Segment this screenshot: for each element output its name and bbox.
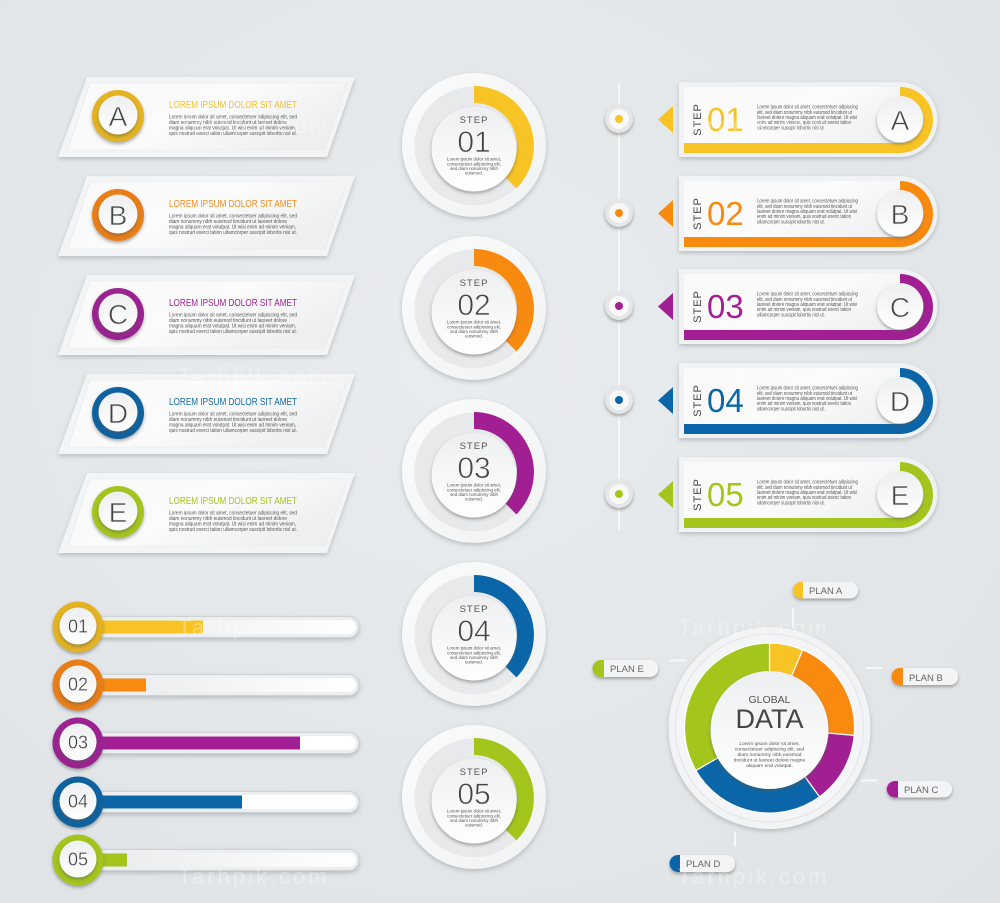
center disc: euismod. — [465, 496, 483, 502]
progress arc — [474, 738, 534, 840]
segment: plan A — [770, 643, 803, 677]
number badge: 05 — [68, 850, 88, 870]
label pill: plan C — [887, 781, 952, 798]
step label: STEP — [692, 197, 704, 230]
number badge — [52, 776, 104, 828]
label pill: plan E — [592, 660, 658, 677]
center disc — [710, 671, 828, 789]
letter badge — [877, 284, 923, 330]
pointer arrow — [658, 293, 673, 320]
step number: 01 — [707, 101, 744, 138]
panel: lettered banner B — [58, 176, 355, 256]
letter badge: C — [890, 292, 910, 323]
letter badge: D — [890, 386, 910, 417]
text block: laoreet dolore magna aliquam erat volutpat. Ut wisi — [757, 302, 857, 308]
center disc: sed diam nonummy nibh — [450, 655, 498, 660]
step number: 03 — [707, 288, 744, 325]
text block: Lorem ipsum dolor sit amet, consectetuer adipiscing elit, sed — [169, 412, 297, 418]
text block: ullamcorper suscipit lobortis nisl ut. — [757, 126, 825, 132]
letter badge: A — [891, 105, 910, 136]
center disc: 02 — [457, 289, 491, 322]
panel: step card 02 — [605, 176, 938, 251]
icon: letter badge C — [92, 288, 144, 340]
progress arc — [474, 249, 534, 351]
progress arc — [474, 86, 534, 188]
label pill: plan A: PLAN A — [809, 586, 843, 597]
timeline node — [605, 105, 633, 133]
segment: plan D — [696, 756, 820, 813]
timeline node — [605, 386, 633, 414]
number badge: 04 — [68, 792, 88, 812]
text block: magna aliquam erat volutpat. Ut wisi enim ad minim veniam, — [169, 224, 296, 230]
center disc — [432, 270, 516, 354]
bar fill — [96, 620, 203, 634]
text block: Lorem ipsum dolor sit amet, consectetuer adipiscing elit, sed — [169, 214, 297, 220]
text block: quis nostrud exerci tation ullamcorper suscipit lobortis nisl ut. — [169, 230, 297, 236]
text block: magna aliquam erat volutpat. Ut wisi enim ad minim veniam, — [169, 522, 296, 528]
center disc: consectetuer adipiscing elit, — [447, 488, 501, 492]
panel: step ring 04 — [402, 562, 546, 706]
timeline node — [605, 292, 633, 320]
watermark: Tarhpik.com — [678, 364, 830, 389]
center disc — [432, 596, 516, 680]
text block: ullamcorper suscipit lobortis nisl ut. — [757, 312, 825, 318]
center disc: aliquam erat volutpat. — [746, 763, 793, 769]
icon: letter badge A — [92, 90, 144, 142]
text block — [169, 510, 297, 533]
center disc: 03 — [457, 452, 491, 485]
panel: progress bar 04 — [52, 776, 359, 828]
text block: enim ad minim veniam, quis nostrud exerci tation — [757, 401, 851, 407]
segment: plan B — [791, 650, 855, 735]
number badge: 03 — [68, 732, 88, 752]
pointer arrow — [658, 481, 673, 508]
center disc: Lorem ipsum dolor sit amet, — [447, 482, 501, 488]
center disc — [432, 432, 516, 518]
step number: 05 — [707, 476, 744, 513]
bar fill — [96, 854, 127, 866]
text block: quis nostrud exerci tation ullamcorper suscipit lobortis nisl ut. — [169, 329, 297, 335]
number badge: 01 — [68, 616, 88, 636]
text block: laoreet dolore magna aliquam erat volutpat. Ut wisi — [757, 115, 857, 121]
center disc: 05 — [457, 778, 491, 811]
text block: enim ad minim veniam, quis nostrud exerci tation — [757, 214, 851, 220]
letter badge — [877, 96, 923, 142]
text block: laoreet dolore magna aliquam erat volutpat. Ut wisi — [757, 396, 857, 402]
letter badge — [877, 472, 923, 518]
text block: diam nonummy nibh euismod tincidunt ut laoreet dolore — [169, 516, 287, 522]
text block — [757, 480, 858, 506]
text block: elit, sed diam nonummy nibh euismod tincidunt ut — [757, 110, 853, 116]
step number: 04 — [707, 382, 744, 419]
timeline line — [618, 84, 620, 530]
center disc: 04 — [457, 615, 491, 648]
center disc: consectetuer adipiscing elit, — [447, 324, 501, 330]
text block: diam nonummy nibh euismod tincidunt ut laoreet dolore — [169, 318, 287, 324]
text block: laoreet dolore magna aliquam erat volutpat. Ut wisi — [757, 209, 857, 215]
center disc: sed diam nonummy nibh — [450, 166, 498, 171]
panel: progress bar 05 — [52, 834, 359, 886]
colored bar and arc — [684, 462, 933, 528]
label pill: plan D — [670, 855, 735, 872]
label pill: plan E: PLAN E — [610, 664, 644, 675]
chart: global data donut — [668, 627, 870, 829]
center disc: DATA — [735, 704, 804, 734]
icon: letter badge A: A — [109, 101, 128, 132]
panel: step ring 02 — [402, 236, 546, 380]
text block: Lorem ipsum dolor sit amet, consectetuer adipiscing elit, sed — [169, 312, 297, 318]
text block: quis nostrud exerci tation ullamcorper suscipit lobortis nisl ut. — [169, 527, 297, 533]
center disc: STEP — [460, 115, 488, 126]
segment: plan C — [802, 733, 854, 797]
number badge: 02 — [68, 674, 88, 694]
watermark: Tarhpik.com — [178, 864, 330, 889]
progress arc — [474, 575, 534, 677]
timeline node — [605, 199, 633, 227]
watermark — [178, 113, 830, 889]
text block: quis nostrud exerci tation ullamcorper suscipit lobortis nisl ut. — [169, 131, 297, 137]
center disc: Lorem ipsum dolor sit amet, — [447, 808, 501, 814]
center disc: tincidunt ut laoreet dolore magna — [734, 758, 805, 764]
panel: lettered banner D — [58, 374, 355, 454]
panel: step ring 05 — [402, 725, 546, 869]
panel: step card 05 — [605, 457, 938, 532]
text block: elit, sed diam nonummy nibh euismod tincidunt ut — [757, 485, 853, 491]
label pill: plan D: PLAN D — [686, 859, 720, 870]
step label: STEP — [692, 290, 704, 323]
center disc: consectetuer adipiscing elit, — [447, 650, 501, 656]
text block — [169, 412, 297, 434]
icon: letter badge E — [92, 486, 144, 538]
text block: diam nonummy nibh euismod tincidunt ut laoreet dolore — [169, 120, 287, 126]
segment: plan E — [685, 643, 770, 770]
center disc: STEP — [460, 441, 488, 452]
panel: step ring 01 — [402, 73, 546, 217]
center disc — [432, 106, 516, 192]
pointer arrow — [658, 106, 673, 133]
text block: quis nostrud exerci tation ullamcorper suscipit lobortis nisl ut. — [169, 428, 297, 434]
center disc — [432, 758, 516, 844]
text block: Lorem ipsum dolor sit amet, consectetuer adipiscing — [757, 198, 858, 204]
center disc: 01 — [457, 126, 491, 159]
text block: ullamcorper suscipit lobortis nisl ut. — [757, 220, 825, 226]
center disc: Lorem ipsum dolor sit amet, — [739, 741, 800, 747]
panel: step card 01 — [605, 82, 938, 157]
center disc: sed diam nonummy nibh — [450, 492, 498, 497]
center disc: euismod. — [465, 334, 483, 338]
number badge — [52, 718, 104, 768]
colored bar and arc — [684, 181, 933, 247]
bar fill — [96, 678, 146, 692]
heading: LOREM IPSUM DOLOR SIT AMET — [169, 397, 297, 408]
text block: ullamcorper suscipit lobortis nisl ut. — [757, 500, 825, 506]
center disc: euismod. — [465, 170, 483, 176]
text block — [169, 312, 297, 335]
watermark: Tarhpik.com — [678, 864, 830, 889]
center disc: consectetuer adipiscing elit, — [447, 814, 501, 818]
watermark: Tarhpik.com — [678, 615, 830, 640]
center disc: STEP — [460, 604, 488, 615]
bar fill — [96, 736, 300, 750]
heading: LOREM IPSUM DOLOR SIT AMET — [169, 100, 297, 111]
label pill: plan B — [892, 668, 958, 685]
watermark: Tarhpik.com — [178, 615, 330, 640]
colored bar and arc — [684, 368, 933, 434]
label pill: plan C: PLAN C — [904, 785, 938, 796]
center disc: euismod. — [465, 660, 483, 664]
icon: letter badge B: B — [109, 200, 127, 231]
panel: progress bar 02 — [52, 660, 359, 710]
icon: letter badge D — [92, 387, 144, 439]
text block: magna aliquam erat volutpat. Ut wisi enim ad minim veniam, — [169, 324, 296, 330]
text block — [169, 214, 297, 236]
letter badge: B — [891, 199, 909, 230]
text block: ullamcorper suscipit lobortis nisl ut. — [757, 406, 825, 412]
number badge — [52, 602, 104, 652]
number badge — [52, 660, 104, 710]
pointer arrow — [658, 387, 673, 414]
text block: Lorem ipsum dolor sit amet, consectetuer adipiscing — [757, 480, 858, 486]
center disc: diam nonummy nibh euismod — [738, 752, 802, 758]
text block: elit, sed diam nonummy nibh euismod tincidunt ut — [757, 391, 853, 397]
heading: LOREM IPSUM DOLOR SIT AMET — [169, 298, 297, 309]
center disc: consectetuer adipiscing elit, — [447, 162, 501, 166]
center disc: Lorem ipsum dolor sit amet, — [447, 156, 501, 162]
text block — [757, 104, 858, 132]
text block: enim ad minim veniam, quis nostrud exerci tation — [757, 307, 851, 313]
letter badge — [877, 378, 923, 424]
label pill: plan B: PLAN B — [909, 673, 943, 684]
icon: letter badge E: E — [109, 497, 127, 528]
pointer arrow — [658, 200, 673, 227]
text block — [757, 198, 858, 226]
text block: Lorem ipsum dolor sit amet, consectetuer adipiscing elit, sed — [169, 114, 297, 120]
text block: Lorem ipsum dolor sit amet, consectetuer adipiscing elit, sed — [169, 510, 297, 516]
watermark: Tarhpik.com — [179, 113, 331, 138]
panel: lettered banner A — [58, 77, 355, 157]
number badge — [52, 834, 104, 886]
heading: LOREM IPSUM DOLOR SIT AMET — [169, 496, 297, 507]
timeline node — [605, 480, 633, 508]
panel: progress bar 01 — [52, 602, 359, 652]
center disc: STEP — [460, 767, 488, 778]
center disc: sed diam nonummy nibh — [450, 329, 498, 334]
text block: Lorem ipsum dolor sit amet, consectetuer adipiscing — [757, 386, 858, 392]
panel: lettered banner C — [58, 275, 355, 355]
text block: enim ad minim veniam, quis nostrud exerci tation — [757, 120, 851, 126]
center disc: Lorem ipsum dolor sit amet, — [447, 646, 501, 650]
heading: LOREM IPSUM DOLOR SIT AMET — [169, 199, 297, 210]
center disc: consectetuer adipiscing elit, sed — [735, 746, 804, 752]
text block: diam nonummy nibh euismod tincidunt ut laoreet dolore — [169, 417, 287, 423]
text block — [169, 114, 297, 137]
step label: STEP — [692, 478, 704, 511]
center disc: GLOBAL — [748, 694, 791, 706]
center disc: STEP — [460, 278, 488, 289]
panel: progress bar 03 — [52, 718, 359, 768]
progress arc — [474, 412, 534, 514]
bar fill — [96, 796, 242, 808]
icon: letter badge B — [92, 189, 144, 241]
text block: elit, sed diam nonummy nibh euismod tincidunt ut — [757, 297, 853, 303]
text block: magna aliquam erat volutpat. Ut wisi enim ad minim veniam, — [169, 422, 296, 428]
icon: letter badge D: D — [108, 398, 128, 429]
text block — [757, 386, 858, 412]
colored bar and arc — [684, 274, 933, 340]
text block: diam nonummy nibh euismod tincidunt ut laoreet dolore — [169, 219, 287, 225]
text block — [757, 292, 858, 318]
center disc: euismod. — [465, 822, 483, 828]
center disc: Lorem ipsum dolor sit amet, — [447, 320, 501, 324]
text block: elit, sed diam nonummy nibh euismod tincidunt ut — [757, 204, 853, 210]
step label: STEP — [692, 103, 704, 136]
colored bar and arc — [684, 87, 933, 153]
step number: 02 — [707, 195, 744, 232]
label pill: plan A — [793, 582, 858, 598]
letter badge — [877, 190, 923, 236]
center disc: sed diam nonummy nibh — [450, 818, 498, 823]
text block: magna aliquam erat volutpat. Ut wisi enim ad minim veniam, — [169, 126, 296, 132]
icon: letter badge C: C — [108, 299, 128, 330]
panel: step card 04 — [605, 363, 938, 438]
panel: step ring 03 — [402, 399, 546, 543]
watermark: Tarhpik.com — [178, 364, 330, 389]
text block: Lorem ipsum dolor sit amet, consectetuer adipiscing — [757, 292, 858, 298]
text block: Lorem ipsum dolor sit amet, consectetuer adipiscing — [757, 104, 858, 110]
watermark: Tarhpik.com — [678, 113, 830, 138]
text block: laoreet dolore magna aliquam erat volutpat. Ut wisi — [757, 490, 857, 496]
panel: lettered banner E — [58, 473, 355, 553]
text block: enim ad minim veniam, quis nostrud exerci tation — [757, 495, 851, 501]
letter badge: E — [891, 480, 909, 511]
step label: STEP — [692, 384, 704, 417]
panel: step card 03 — [605, 269, 938, 344]
